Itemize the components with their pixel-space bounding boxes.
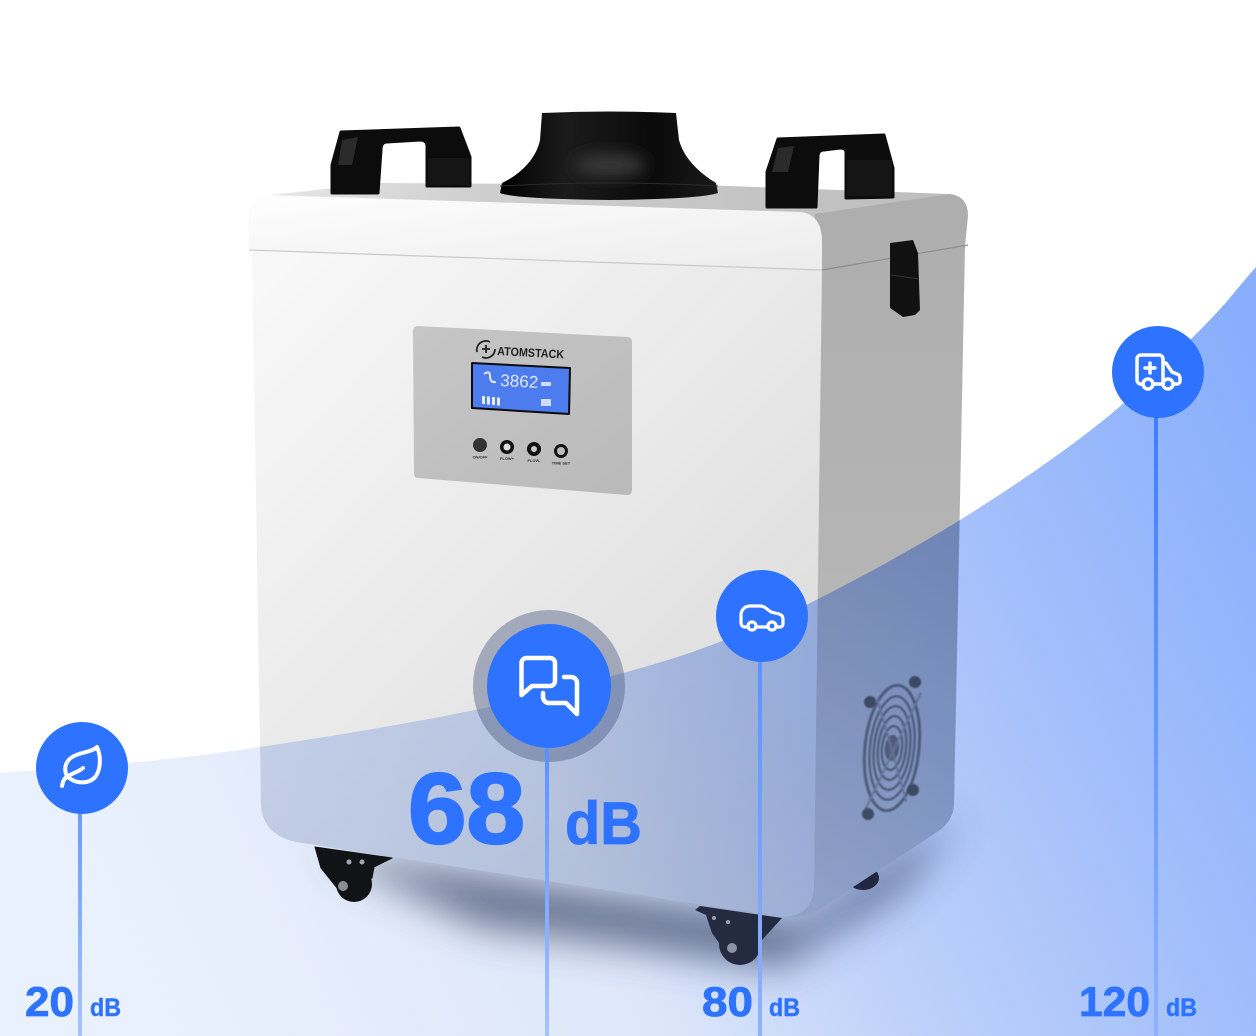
- time set button: TIME SET: [552, 460, 571, 466]
- rear wheel: [847, 866, 879, 890]
- value: [25, 978, 121, 1025]
- badge: [487, 624, 611, 748]
- brand name: ATOMSTACK: [497, 344, 565, 362]
- badge: [716, 570, 808, 662]
- value: dB: [769, 994, 800, 1022]
- control panel: [413, 326, 632, 495]
- LCD display: [472, 363, 570, 414]
- icon: car: [741, 606, 783, 630]
- side panel: [790, 194, 968, 917]
- side latch: [890, 240, 920, 317]
- brand logo: [477, 341, 495, 358]
- on/off button: ON/OFF: [472, 454, 488, 460]
- stem: [758, 658, 762, 1036]
- time set button: [552, 444, 571, 466]
- front lid: [249, 195, 822, 270]
- marker: 120 dB siren: [1079, 326, 1204, 1036]
- value: [1079, 978, 1197, 1025]
- right handle: [767, 135, 893, 207]
- flow plus button: FLOW+: [500, 456, 515, 461]
- flow minus button: [527, 442, 541, 463]
- stem: [545, 746, 549, 1036]
- value: 20: [25, 978, 74, 1025]
- value: dB: [90, 994, 121, 1022]
- icon: leaf: [62, 747, 100, 786]
- flow plus button: [500, 440, 515, 461]
- icon: ambulance: [1137, 355, 1180, 389]
- value: dB: [1166, 994, 1197, 1022]
- stem: [1154, 414, 1158, 1036]
- icon: chat bubbles: [522, 658, 577, 714]
- value: [408, 753, 642, 865]
- lid seam: [249, 250, 822, 270]
- left handle: [332, 128, 470, 193]
- machine ground shadow: [320, 815, 960, 965]
- right caster: [695, 906, 782, 965]
- top surface: [262, 183, 968, 225]
- halo ring: [473, 610, 625, 762]
- exhaust funnel: [500, 112, 718, 200]
- on/off button: [472, 438, 488, 460]
- blue tint on machine below curve: [260, 600, 921, 917]
- badge: [1112, 326, 1204, 418]
- LCD display: 3862: [500, 371, 539, 392]
- fan screws: [862, 676, 921, 820]
- left caster: [315, 847, 392, 902]
- rising noise curve: [0, 267, 1256, 1036]
- side seam: [822, 245, 968, 270]
- value: 120: [1079, 978, 1150, 1025]
- badge: [36, 722, 128, 814]
- stem: [78, 810, 82, 1036]
- front body: [252, 250, 822, 917]
- marker: 80 dB traffic: [702, 570, 808, 1036]
- marker: 20 dB quiet: [25, 722, 128, 1036]
- product: fume extractor: [249, 112, 968, 965]
- value: 80: [702, 978, 753, 1025]
- fan grille: [858, 683, 925, 814]
- value: [702, 978, 800, 1025]
- marker: 68 dB current: [408, 610, 642, 1036]
- value: dB: [565, 790, 642, 857]
- flow minus button: FLOW-: [527, 458, 541, 463]
- value: 68: [408, 753, 525, 865]
